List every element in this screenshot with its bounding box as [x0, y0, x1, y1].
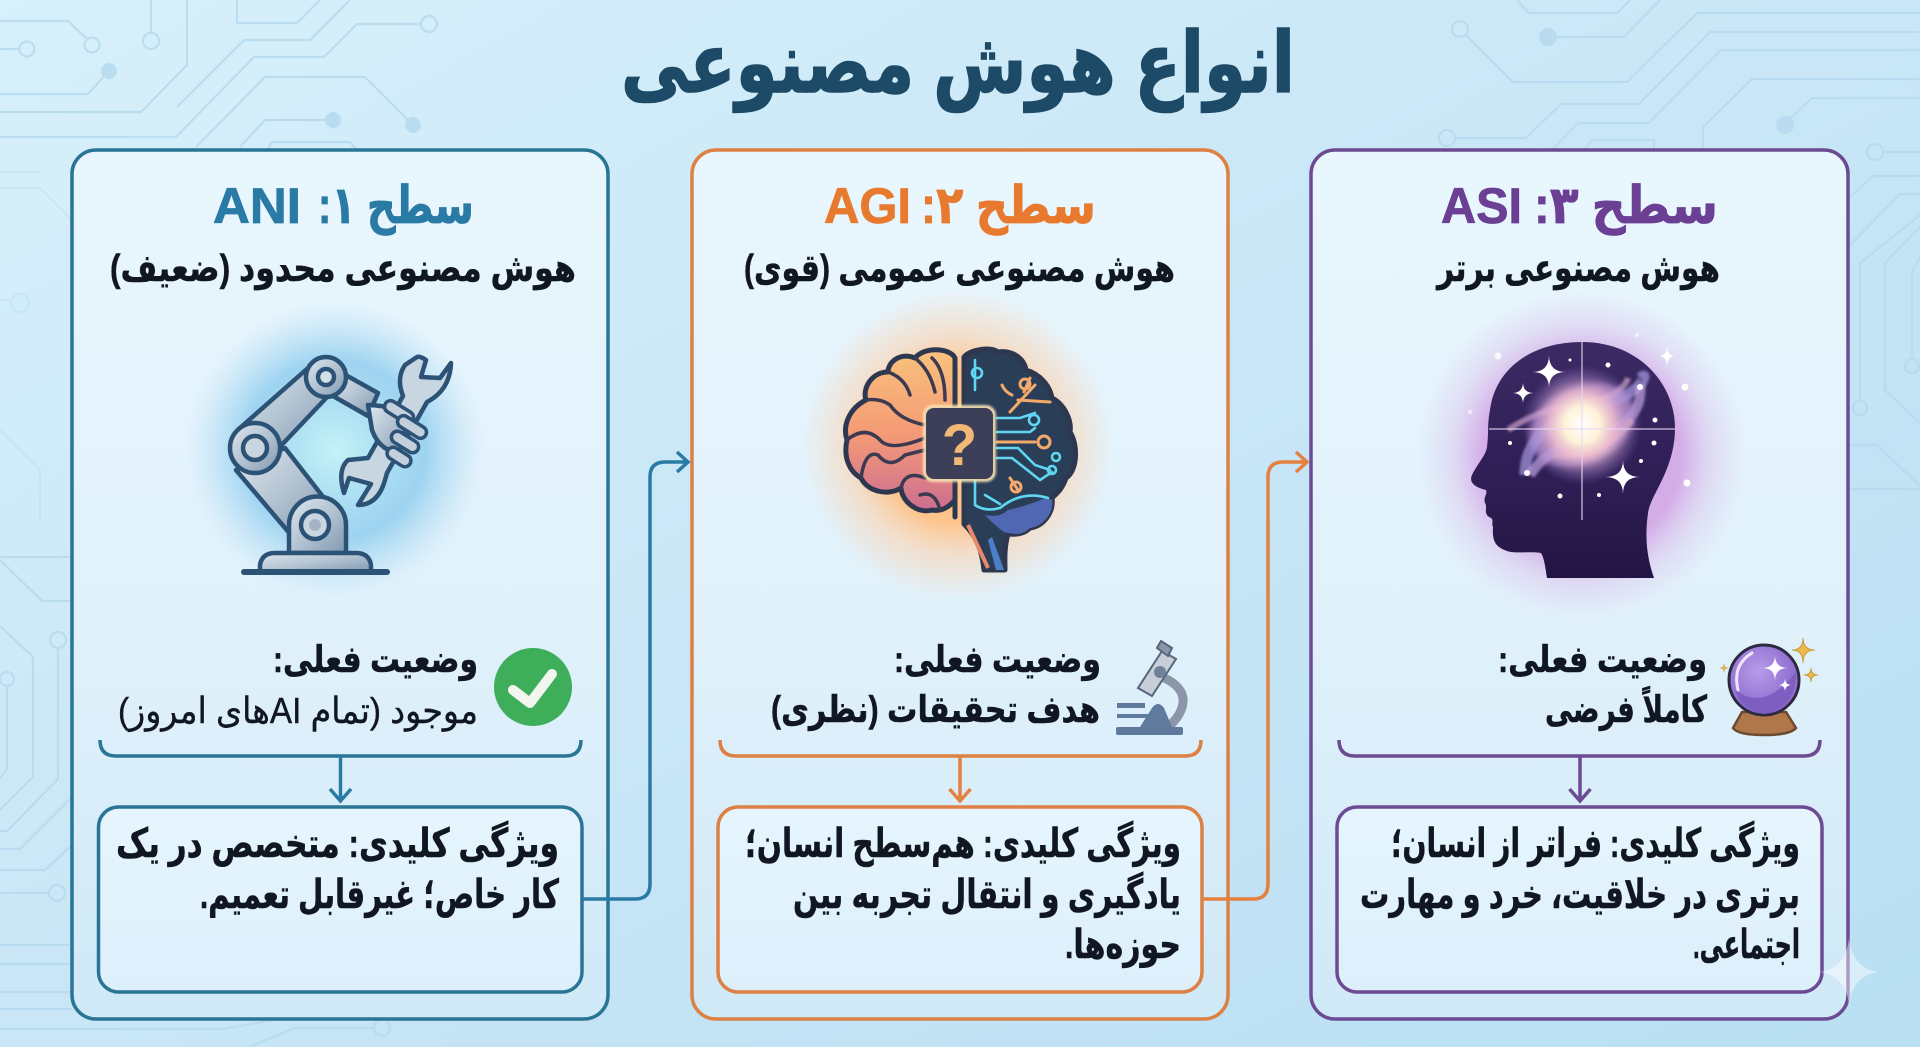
bracket: [720, 740, 1201, 756]
heading: level 2: AGI: [824, 178, 911, 234]
panel: level 3 ASI: [1311, 150, 1848, 1019]
box: key feature: اجتماعی.: [1693, 923, 1800, 967]
glow: purple: [1417, 290, 1747, 620]
panel: level 1 ANI: [72, 150, 608, 1019]
heading: level 2: سطح ۲:: [921, 177, 1096, 236]
status: current state: وضعیت فعلی:: [1498, 639, 1707, 681]
arrow: ANI to AGI connector: [582, 452, 688, 899]
subheading: super AI: هوش مصنوعی برتر: [1435, 248, 1720, 290]
status: current state: موجود (تمام AIهای امروز): [118, 690, 478, 732]
box: key feature: [1337, 807, 1822, 992]
status: current state: [118, 639, 478, 732]
status: current state: وضعیت فعلی:: [894, 639, 1101, 681]
glow: blue: [185, 300, 485, 600]
box: key feature: [718, 807, 1202, 992]
icon: robot arm with wrench: [230, 357, 451, 572]
chip: ?: [942, 413, 977, 478]
heading: level 1: سطح ۱:: [318, 177, 474, 236]
icon: head silhouette with galaxy: [1468, 333, 1690, 578]
heading: level 2: [824, 177, 1096, 236]
arrow: AGI to ASI connector: [1202, 452, 1307, 899]
icon: green check: [494, 648, 572, 726]
arrow: down: [1570, 756, 1590, 801]
bracket: [1339, 740, 1820, 756]
status: current state: [771, 639, 1101, 731]
subheading: narrow AI: هوش مصنوعی محدود (ضعیف): [110, 248, 576, 291]
icon: microscope: [1116, 641, 1183, 735]
heading: level 1: [213, 177, 474, 236]
box: key feature: ویژگی کلیدی: متخصص در یک: [116, 820, 559, 867]
heading: level 3: سطح ۳:: [1534, 177, 1718, 236]
arrow: down: [950, 756, 970, 801]
heading: level 3: ASI: [1441, 178, 1522, 234]
panel: level 2 AGI: [692, 150, 1228, 1019]
heading: level 1: ANI: [213, 178, 301, 234]
status: current state: کاملاً فرضی: [1545, 686, 1707, 731]
icon: crystal ball: [1720, 638, 1818, 735]
chip: [925, 407, 994, 480]
box: key feature: یادگیری و انتقال تجربه بین: [793, 871, 1181, 918]
title: انواع هوش مصنوعی: [621, 16, 1295, 113]
bracket: [100, 740, 581, 756]
box: key feature: [98, 807, 582, 992]
box: key feature: کار خاص؛ غیرقابل تعمیم.: [200, 873, 560, 918]
status: current state: هدف تحقیقات (نظری): [771, 689, 1100, 731]
subheading: general AI: هوش مصنوعی عمومی (قوی): [744, 248, 1175, 290]
status: current state: وضعیت فعلی:: [273, 639, 478, 681]
box: key feature: حوزه‌ها.: [1065, 923, 1181, 968]
box: key feature: ویژگی کلیدی: هم‌سطح انسان؛: [745, 820, 1181, 867]
watermark sparkle: [1820, 938, 1878, 1005]
heading: level 3: [1441, 177, 1718, 236]
icon: brain with question chip: [846, 349, 1076, 570]
glow: orange: [803, 290, 1113, 600]
arrow: down: [330, 756, 351, 801]
status: current state: [1498, 639, 1707, 731]
